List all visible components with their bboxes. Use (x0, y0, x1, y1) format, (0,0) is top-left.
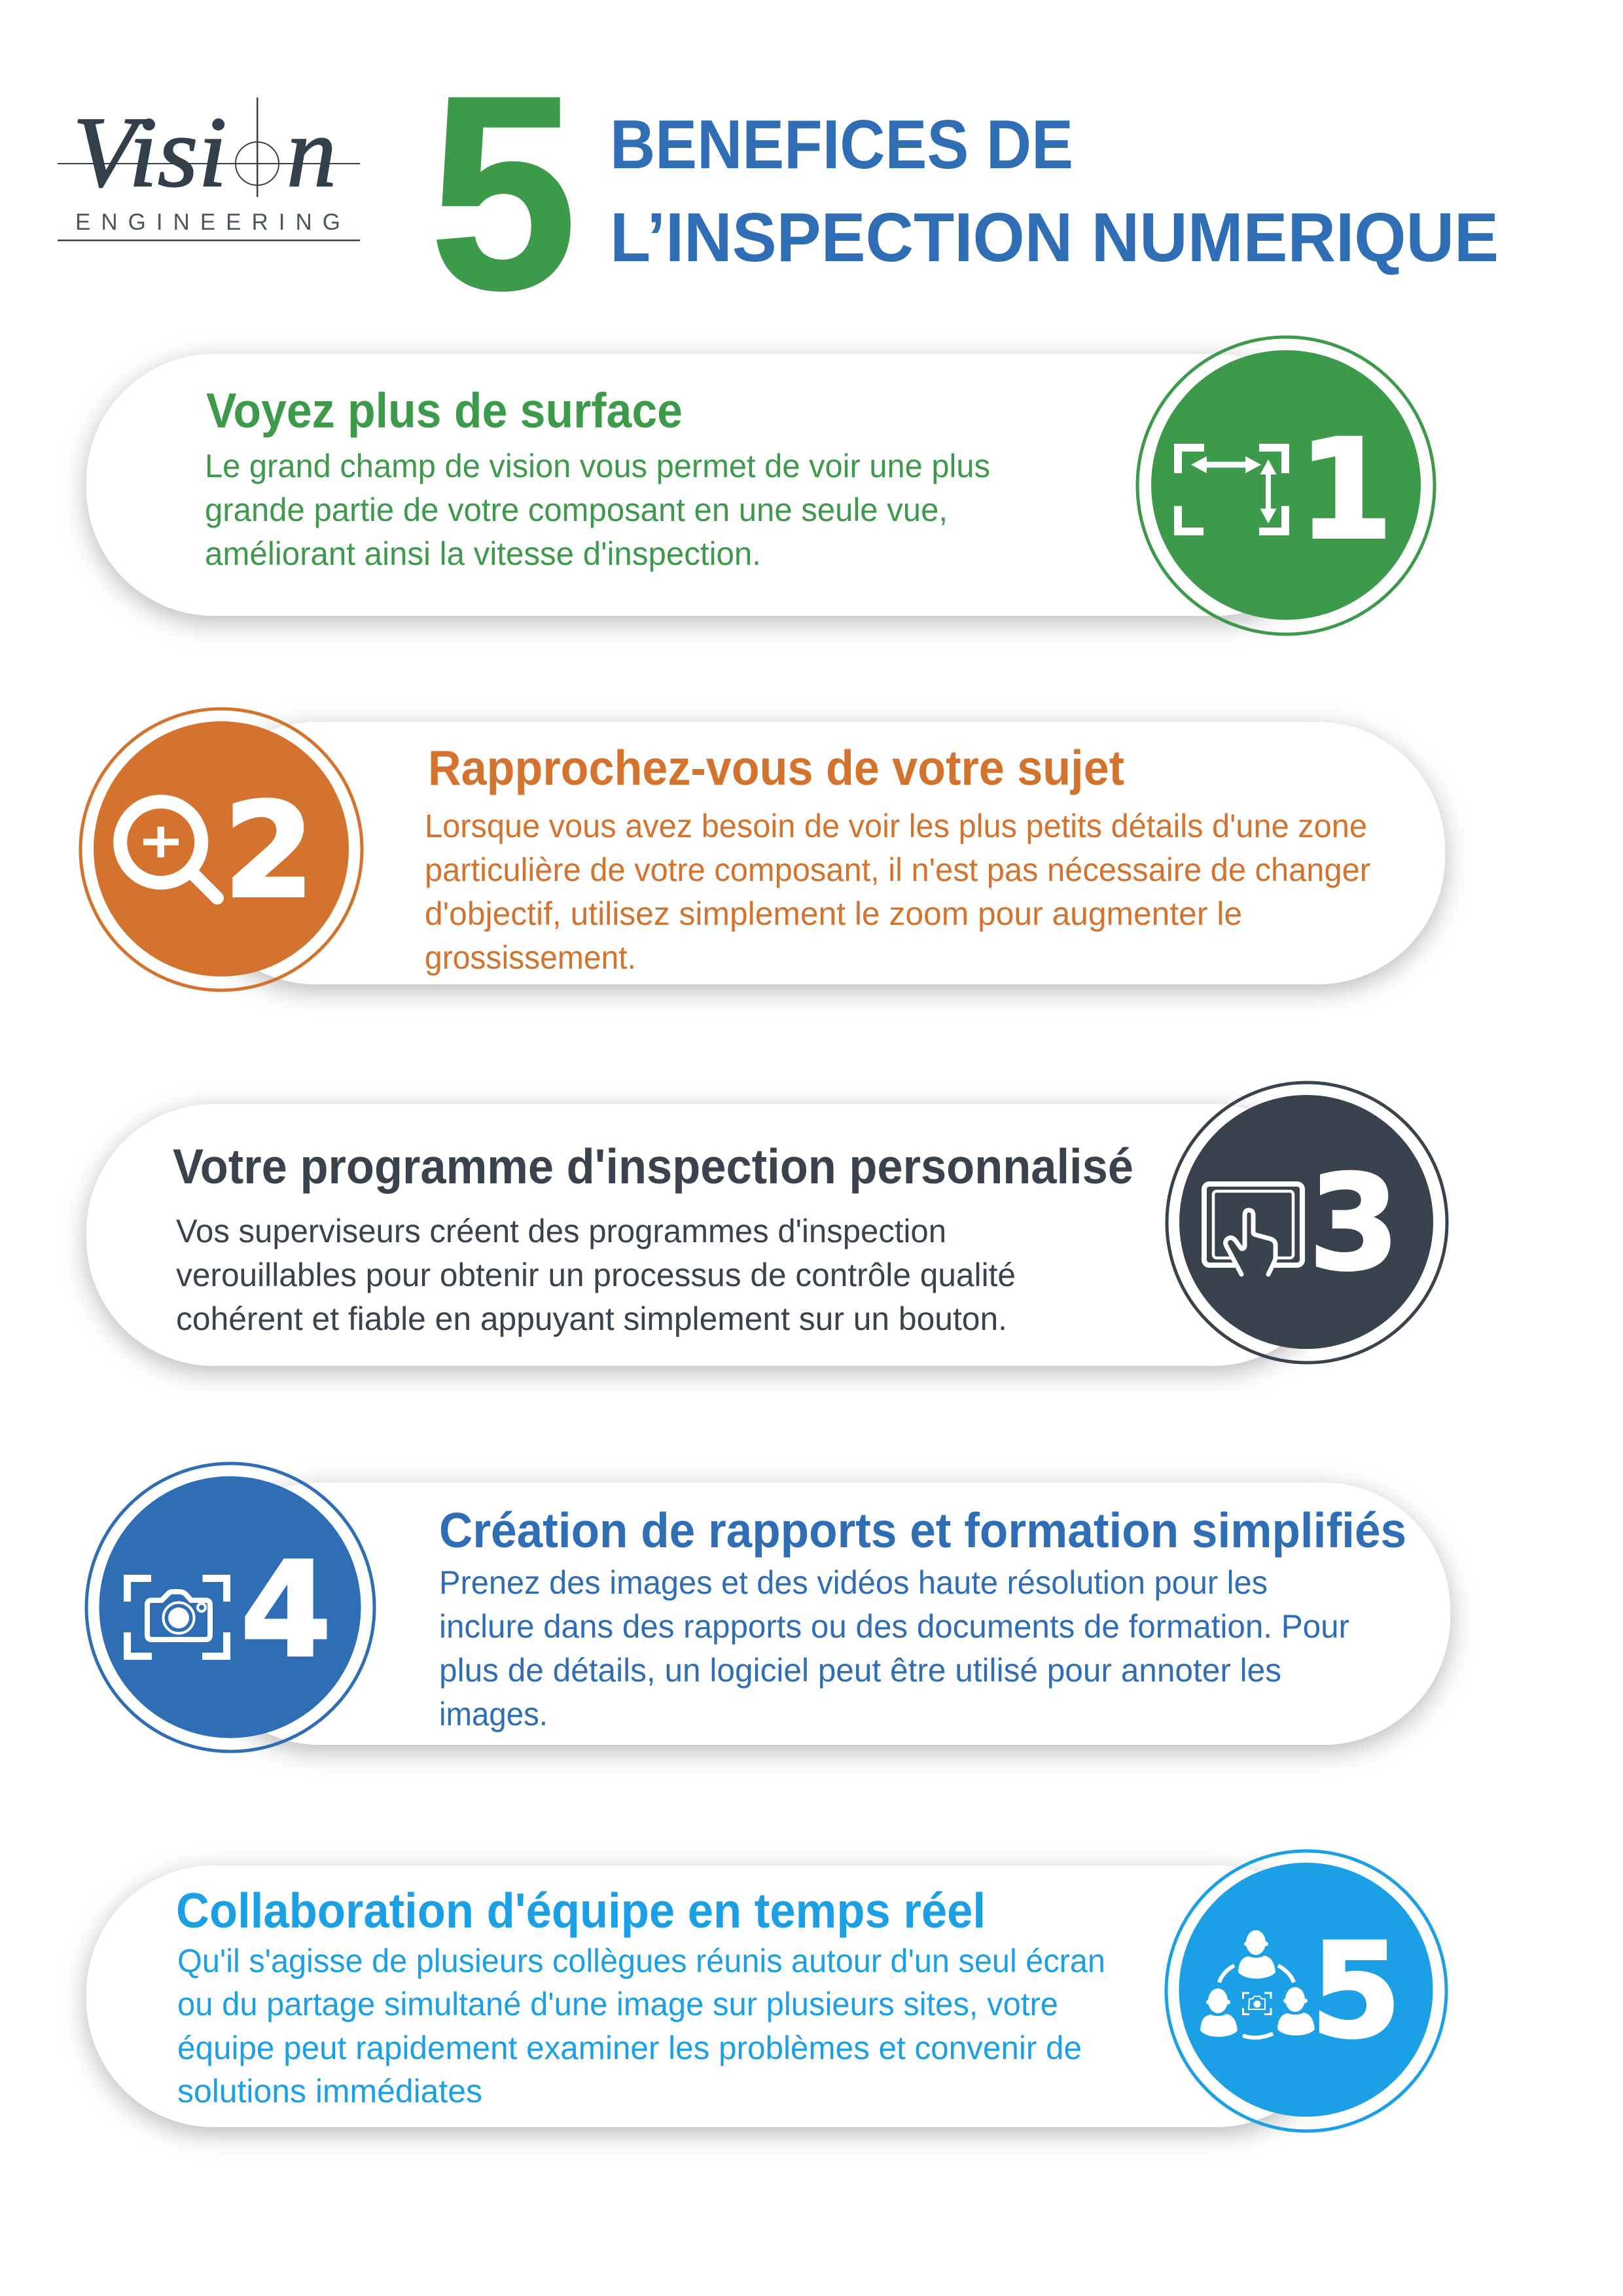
badge 1 (1137, 337, 1435, 634)
card 5 body text: solutions immédiates (177, 2073, 482, 2109)
card 2 body text: d'objectif, utilisez simplement le zoom pour augmenter le (425, 895, 1242, 932)
card 1 body text (205, 448, 990, 572)
card 5 background (86, 1865, 1343, 2127)
icon: camera in frame (127, 1579, 226, 1656)
number 1: 1 (1298, 410, 1393, 570)
card 1 heading: Voyez plus de surface (206, 383, 683, 438)
panel 4: Création de rapports et formation simplifiés (86, 1463, 1450, 1751)
title (610, 106, 1499, 276)
icon: touch screen with hand (1204, 1184, 1302, 1274)
logo: Vision Engineering (58, 97, 360, 241)
card 2 body text (425, 808, 1370, 976)
title: L’INSPECTION NUMERIQUE (610, 199, 1499, 276)
card 1 body text: améliorant ainsi la vitesse d'inspection. (205, 535, 761, 572)
card 3 heading: Votre programme d'inspection personnalisé (173, 1139, 1133, 1194)
panel 2: Rapprochez-vous de votre sujet (80, 709, 1445, 990)
number 5: 5 (1310, 1915, 1402, 2068)
card 2 body text: particulière de votre composant, il n'est pas nécessaire de changer (425, 852, 1370, 888)
logo: Vision Engineering: ENGINEERING (75, 209, 340, 235)
card 1 body text: grande partie de votre composant en une seule vue, (205, 492, 948, 528)
card 2 heading: Rapprochez-vous de votre sujet (428, 740, 1124, 795)
card 4 body text: images. (439, 1696, 548, 1732)
title: BENEFICES DE (610, 106, 1073, 183)
card 2 body text: Lorsque vous avez besoin de voir les plus petits détails d'une zone (425, 808, 1367, 844)
card 3 body text: verouillables pour obtenir un processus de contrôle qualité (176, 1257, 1016, 1293)
card 3 body text: cohérent et fiable en appuyant simplement sur un bouton. (176, 1300, 1007, 1337)
card 4 background (193, 1482, 1450, 1745)
logo: Vision Engineering: Visi (73, 97, 227, 208)
icon: magnifying glass with plus (120, 802, 217, 898)
logo: Vision Engineering: n (287, 97, 336, 208)
card 5 body text: Qu'il s'agisse de plusieurs collègues réunis autour d'un seul écran (177, 1943, 1105, 1979)
icon: field of view frame with arrows (1178, 448, 1285, 531)
big number 5: 5 (429, 39, 577, 347)
panel 5: Collaboration d'équipe en temps réel (86, 1851, 1446, 2131)
card 4 body text: inclure dans des rapports ou des documents de formation. Pour (439, 1608, 1349, 1645)
card 1 body text: Le grand champ de vision vous permet de voir une plus (205, 448, 990, 484)
card 2 background (188, 722, 1445, 984)
card 3 body text (176, 1213, 1016, 1337)
badge 3 (1167, 1083, 1447, 1363)
card 4 body text: Prenez des images et des vidéos haute résolution pour les (439, 1564, 1268, 1601)
number 2: 2 (223, 775, 315, 927)
badge 4 (86, 1463, 374, 1751)
icon: team around a camera (1200, 1930, 1315, 2037)
badge 5 (1166, 1851, 1446, 2131)
card 5 body text: équipe peut rapidement examiner les problèmes et convenir de (177, 2030, 1082, 2066)
badge 2 (80, 709, 362, 990)
card 5 body text: ou du partage simultané d'une image sur plusieurs sites, votre (177, 1986, 1058, 2022)
card 3 body text: Vos superviseurs créent des programmes d'inspection (176, 1213, 946, 1249)
number 4: 4 (240, 1534, 332, 1687)
panel 1: Voyez plus de surface (86, 337, 1435, 634)
card 4 body text (439, 1564, 1349, 1732)
card 5 heading: Collaboration d'équipe en temps réel (176, 1883, 986, 1938)
card 3 background (86, 1104, 1340, 1366)
card 1 background (86, 354, 1343, 616)
card 5 body text (177, 1943, 1105, 2109)
card 4 body text: plus de détails, un logiciel peut être utilisé pour annoter les (439, 1652, 1281, 1689)
card 2 body text: grossissement. (425, 939, 636, 976)
number 3: 3 (1308, 1147, 1400, 1300)
card 4 heading: Création de rapports et formation simplifiés (439, 1503, 1406, 1558)
panel 3: Votre programme d'inspection personnalisé (86, 1083, 1447, 1366)
